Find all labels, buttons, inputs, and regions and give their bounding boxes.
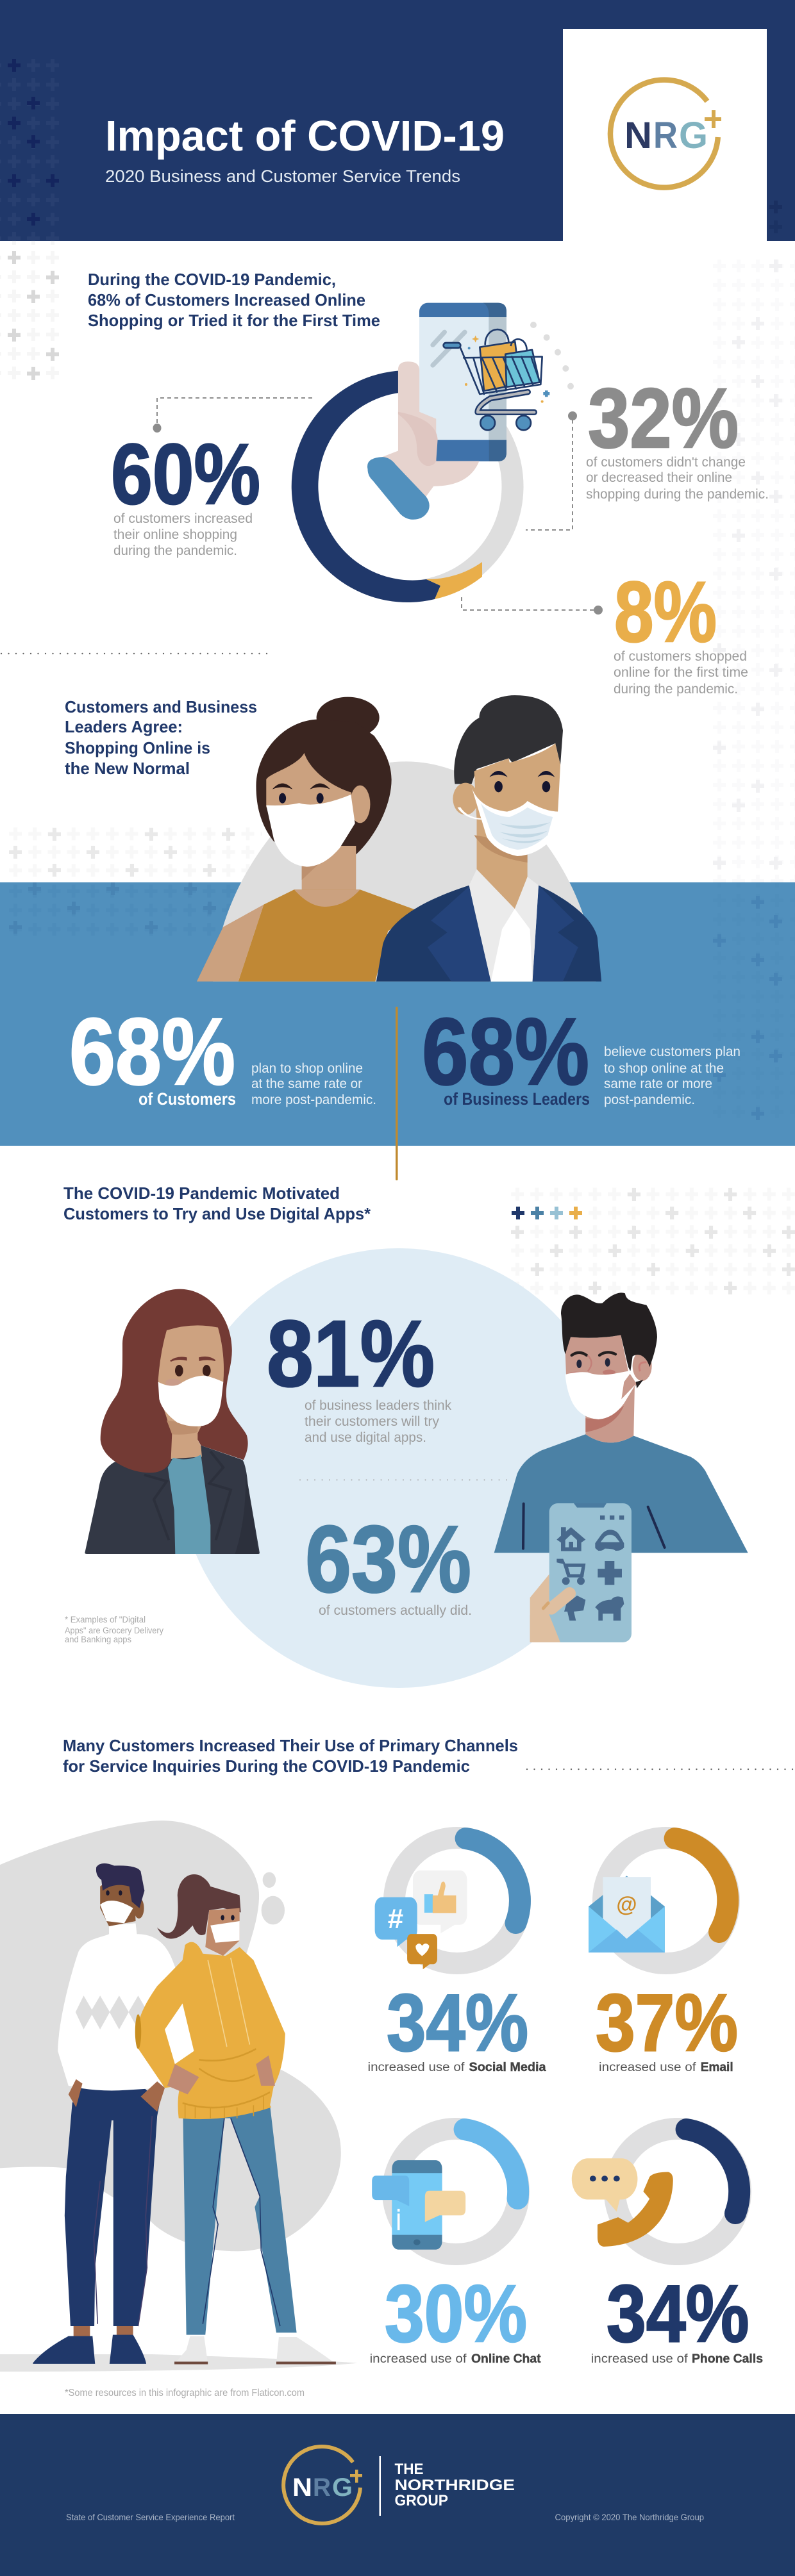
stat: 68% of business leaders: 68% xyxy=(422,999,589,1105)
channel: online chat xyxy=(370,2129,541,2366)
channel: email: increased use of xyxy=(599,2061,696,2074)
sparkles and dots xyxy=(465,322,574,403)
stat: 81%: their customers will try xyxy=(305,1414,440,1429)
logo panel: G xyxy=(679,115,708,156)
stat: 8%: online for the first time xyxy=(614,665,748,680)
stat: 32%: shopping during the pandemic. xyxy=(586,487,769,502)
footer logo: G xyxy=(332,2473,353,2502)
hand behind phone xyxy=(530,1574,549,1642)
app icon: house xyxy=(556,1527,585,1551)
stat: 68% of business leaders: same rate or more xyxy=(604,1077,712,1091)
channel: social media: # xyxy=(388,1903,403,1935)
footer logo: NORTHRIDGE xyxy=(395,2477,515,2494)
channel: online chat: 30% xyxy=(385,2268,527,2359)
section heading: online shopping: Shopping or Tried it for the First Time xyxy=(88,311,380,330)
leader: 60% xyxy=(153,398,312,433)
channel: phone calls: Phone Calls xyxy=(692,2352,763,2366)
channel: social media: 34% xyxy=(387,1977,528,2068)
section heading: primary channels: for Service Inquiries During the COVID-19 Pandemic xyxy=(63,1756,470,1776)
title: Impact of COVID-19 xyxy=(105,112,505,160)
stat: 68% of business leaders: post-pandemic. xyxy=(604,1093,695,1107)
stat: 68% of customers: plan to shop online xyxy=(251,1061,363,1076)
section heading: new normal: Shopping Online is xyxy=(65,738,210,757)
icon: hand with cuff xyxy=(367,361,479,520)
plus pattern: left xyxy=(0,241,59,383)
woman xyxy=(197,697,416,982)
pale blue circle xyxy=(178,1248,618,1688)
blue band xyxy=(0,882,795,1146)
phone xyxy=(549,1503,632,1642)
stat: 8% xyxy=(614,565,748,697)
channel: online chat: Online Chat xyxy=(471,2352,541,2366)
footer logo: N xyxy=(292,2473,312,2502)
stat: 81%: of business leaders think xyxy=(305,1398,451,1413)
footnote: digital apps xyxy=(65,1614,163,1644)
shopping bags xyxy=(480,329,540,391)
arch xyxy=(213,761,596,982)
leader: 8% xyxy=(462,594,603,615)
footer logo: R xyxy=(313,2473,331,2502)
icon: social bubbles xyxy=(375,1870,467,1969)
illustration: couple wearing masks xyxy=(0,1821,358,2372)
icon: envelope xyxy=(589,1876,665,1953)
channel: email: 37% xyxy=(596,1977,738,2068)
footnote: digital apps: Apps" are Grocery Delivery xyxy=(65,1625,163,1635)
stat: 68% of customers xyxy=(69,999,376,1109)
app icon: plus xyxy=(598,1561,622,1585)
app icon: car xyxy=(595,1530,624,1551)
grey blobs xyxy=(0,1821,341,2251)
stat: 68% of business leaders: believe customers plan xyxy=(604,1044,741,1059)
section heading: online shopping: During the COVID-19 Pandemic, xyxy=(88,270,336,289)
stat: 68% of business leaders xyxy=(422,999,741,1109)
channel: phone calls: 34% xyxy=(607,2268,749,2359)
stat: 63%: 63% xyxy=(305,1507,471,1612)
logo panel: R xyxy=(653,115,678,156)
app icon: plane xyxy=(564,1596,585,1621)
illustration: woman and business leader xyxy=(197,695,601,982)
stat: 60%: their online shopping xyxy=(113,527,237,542)
man xyxy=(33,1863,178,2364)
channel: social media: Social Media xyxy=(469,2061,546,2074)
stat: 32% xyxy=(586,371,769,502)
footer logo: GROUP xyxy=(395,2492,448,2509)
section heading: digital apps: The COVID-19 Pandemic Motivated xyxy=(63,1184,340,1203)
stat: 60% xyxy=(111,427,260,558)
stat: 32%: of customers didn't change xyxy=(586,455,746,470)
section heading: new normal: Leaders Agree: xyxy=(65,717,183,736)
footer copyright: Copyright © 2020 The Northridge Group xyxy=(555,2512,704,2522)
footnote: digital apps: * Examples of "Digital xyxy=(65,1614,146,1624)
resources footnote: *Some resources in this infographic are from Flaticon.com xyxy=(65,2388,305,2398)
logo panel xyxy=(563,29,767,241)
app icon: dog xyxy=(595,1596,624,1621)
stat: 60%: of customers increased xyxy=(113,511,253,526)
footer source: State of Customer Service Experience Report xyxy=(66,2512,235,2522)
footnote: digital apps: and Banking apps xyxy=(65,1634,131,1644)
icon: phone with shopping cart xyxy=(419,303,574,461)
stat: 68% of business leaders: to shop online at the xyxy=(604,1061,724,1076)
plus pattern: top right with colour accents xyxy=(508,1185,795,1298)
plus pattern: right xyxy=(710,256,795,882)
section heading: online shopping: 68% of Customers Increased Online xyxy=(88,290,365,310)
illustration: man with phone of apps xyxy=(494,1292,748,1642)
icon: phone handset with bubble xyxy=(572,2158,673,2247)
subtitle: 2020 Business and Customer Service Trends xyxy=(105,167,460,186)
plus pattern: middle left xyxy=(6,825,262,881)
channel: email xyxy=(589,1838,738,2074)
thumb xyxy=(551,1594,569,1608)
section heading: new normal xyxy=(65,697,257,778)
stat: 68% of customers: of Customers xyxy=(138,1089,236,1109)
footer band xyxy=(0,2414,795,2576)
channel: social media: increased use of xyxy=(368,2061,465,2074)
ground shadow xyxy=(0,2354,358,2372)
logo panel: N xyxy=(624,115,652,156)
illustration: woman in dark jacket xyxy=(85,1289,260,1554)
stat: 60%: 60% xyxy=(111,427,260,522)
cart xyxy=(444,343,542,430)
stat: 63%: of customers actually did. xyxy=(319,1603,472,1618)
header band xyxy=(0,0,795,241)
channel: email: Email xyxy=(701,2061,733,2074)
donut chart: online shopping split xyxy=(292,370,513,602)
stat: 8%: 8% xyxy=(614,565,717,660)
section heading: digital apps: Customers to Try and Use Digital Apps* xyxy=(63,1204,371,1223)
channel: email: @ xyxy=(616,1892,637,1916)
phone xyxy=(419,303,506,461)
leader: 32% xyxy=(526,411,577,530)
stat: 32%: or decreased their online xyxy=(586,470,732,485)
section heading: new normal: the New Normal xyxy=(65,759,190,778)
section heading: primary channels xyxy=(63,1736,518,1776)
channel: social media xyxy=(368,1838,546,2074)
stat: 68% of customers: more post-pandemic. xyxy=(251,1093,376,1107)
footer logo xyxy=(283,2447,515,2523)
section heading: new normal: Customers and Business xyxy=(65,697,257,716)
channel: online chat: increased use of xyxy=(370,2352,467,2366)
channel: phone calls: increased use of xyxy=(591,2352,688,2366)
stat: 81%: and use digital apps. xyxy=(305,1430,426,1445)
man in blue suit xyxy=(376,695,601,982)
stat: 68% of customers: 68% xyxy=(69,999,235,1105)
section heading: primary channels: Many Customers Increased Their Use of Primary Channels xyxy=(63,1736,518,1755)
stat: 68% of customers: at the same rate or xyxy=(251,1077,362,1091)
stat: 8%: of customers shopped xyxy=(614,649,747,664)
section heading: online shopping xyxy=(88,270,380,330)
stat: 81%: 81% xyxy=(267,1301,435,1407)
stat: 8%: during the pandemic. xyxy=(614,682,738,697)
stat: 32%: 32% xyxy=(588,371,739,465)
footer logo: THE xyxy=(395,2461,423,2478)
channel: phone calls xyxy=(572,2129,763,2366)
app icon: cart xyxy=(556,1559,585,1578)
stat: 60%: during the pandemic. xyxy=(113,543,237,558)
icon: phone chat xyxy=(372,2160,465,2250)
section heading: digital apps xyxy=(63,1184,371,1223)
woman xyxy=(135,1874,336,2365)
stat: 68% of business leaders: of Business Leaders xyxy=(444,1089,590,1109)
